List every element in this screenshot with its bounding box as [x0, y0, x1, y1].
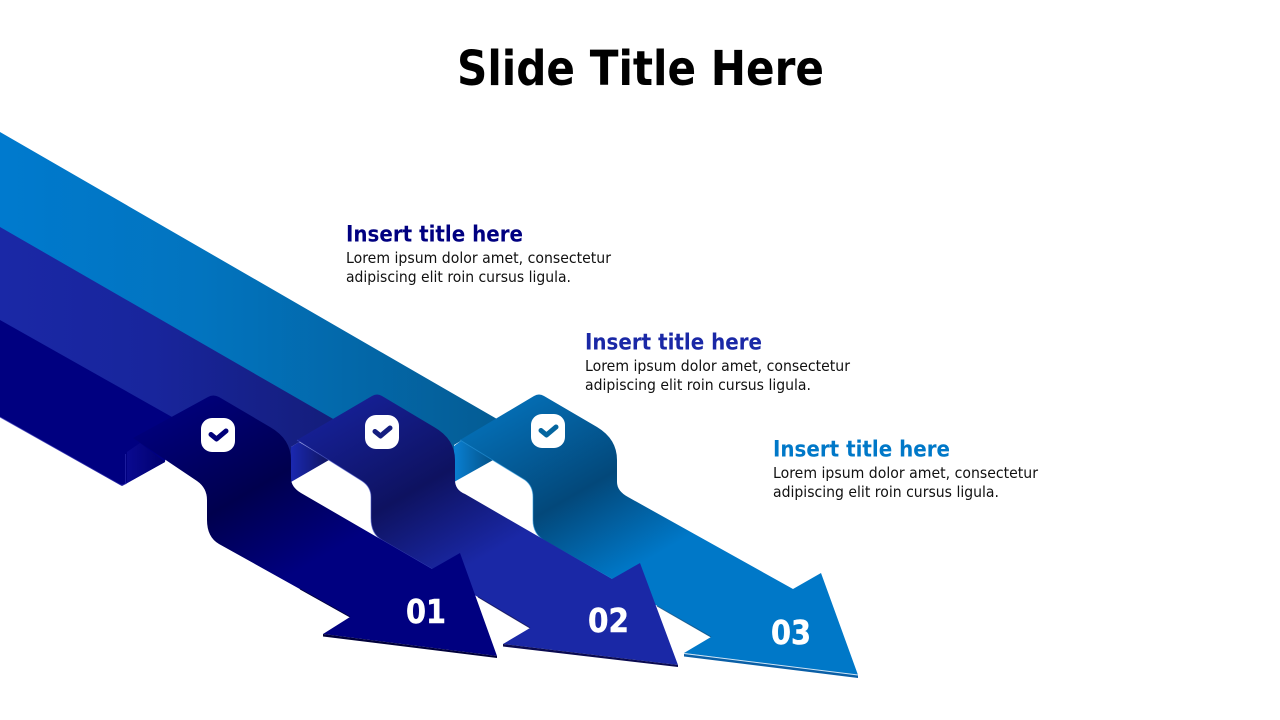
text block 3: adipiscing elit roin cursus ligula. — [773, 483, 999, 501]
text block 3 — [773, 438, 1039, 501]
text block 3: Lorem ipsum dolor amet, consectetur — [773, 464, 1039, 482]
text block 2: Insert title here — [585, 330, 762, 356]
text block 1 — [346, 222, 612, 286]
text block 3: Insert title here — [773, 438, 950, 462]
arrow 02: medium blue — [0, 227, 678, 667]
text block 1: Lorem ipsum dolor amet, consectetur — [346, 249, 612, 267]
text block 1: Insert title here — [346, 222, 523, 248]
icon: check 03 — [531, 414, 565, 448]
icon: check 01 — [201, 418, 235, 452]
text block 2: adipiscing elit roin cursus ligula. — [585, 376, 811, 394]
number 02: 02 — [588, 601, 629, 640]
text block 2: Lorem ipsum dolor amet, consectetur — [585, 357, 851, 375]
arrow 01: navy — [0, 320, 497, 658]
text block 2 — [585, 330, 851, 394]
arrow 03: light blue — [0, 132, 858, 678]
title: Slide Title Here — [457, 41, 824, 97]
text block 1: adipiscing elit roin cursus ligula. — [346, 268, 571, 286]
number 03: 03 — [771, 613, 811, 652]
icon: check 02 — [365, 415, 399, 449]
number 01: 01 — [406, 592, 446, 631]
